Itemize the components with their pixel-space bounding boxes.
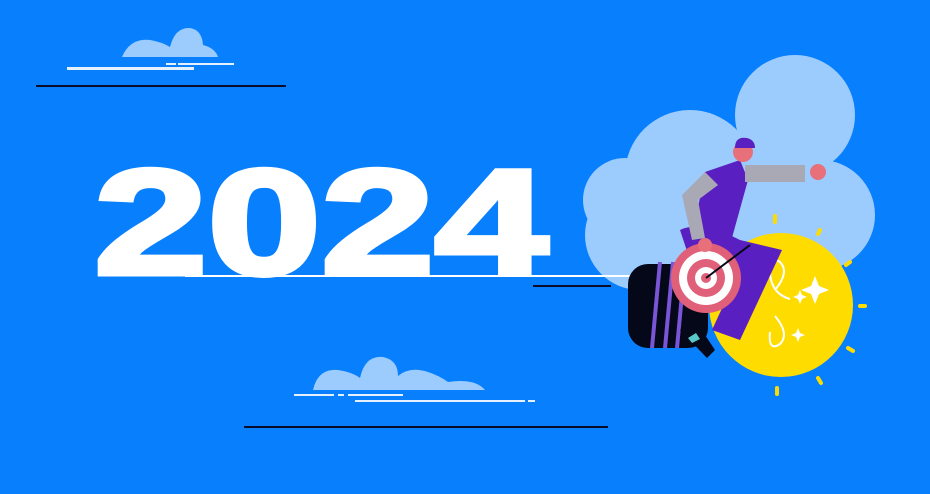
bulb: [709, 233, 853, 377]
lines: bottom: [244, 394, 608, 428]
illustration: man riding lightbulb: [628, 138, 865, 394]
head: [733, 142, 753, 162]
target: [671, 243, 741, 313]
lines: top left: [36, 63, 286, 87]
legs: [680, 227, 782, 340]
cloud: top left: [122, 28, 218, 57]
cloud: bottom: [313, 357, 485, 390]
title: 2024: 2024: [94, 138, 548, 306]
blob background: [583, 55, 875, 295]
bulb base: [628, 264, 708, 348]
lines under title: [185, 275, 630, 287]
torso: [690, 160, 748, 248]
bulb rays: [775, 216, 865, 394]
arms: [745, 165, 805, 182]
